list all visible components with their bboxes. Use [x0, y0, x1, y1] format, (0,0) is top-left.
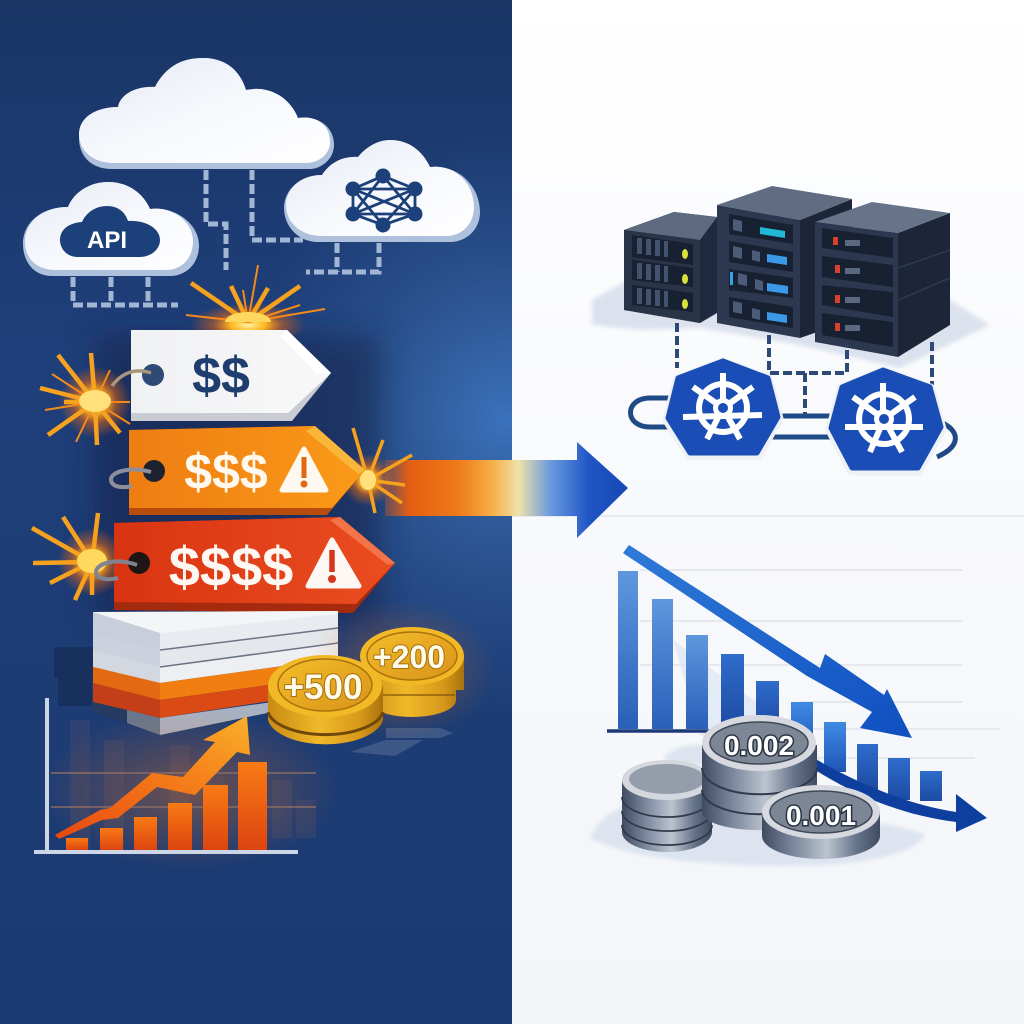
- coin stack: +200: [360, 627, 464, 717]
- icon: server rack center: [717, 186, 852, 338]
- icon: left burst top: [40, 353, 131, 445]
- kubernetes ring: [630, 398, 955, 457]
- coin stack: +500: [268, 655, 383, 744]
- chart glow and gridlines: [40, 710, 340, 870]
- icon: kubernetes left: [668, 361, 778, 455]
- coin stack: +200: +200: [373, 639, 445, 675]
- coin stack: 0.001: [762, 785, 880, 859]
- tag: dollar two: [112, 330, 331, 421]
- tag shadow: [95, 335, 380, 625]
- network connector lines: [677, 323, 932, 415]
- coin stack: 0.002: [702, 715, 817, 830]
- coin glow: [305, 600, 495, 740]
- arrow: large falling: [623, 545, 912, 738]
- cloud connector lines: [73, 170, 379, 305]
- icon: right burst: [342, 428, 412, 513]
- stacked layers: [93, 611, 338, 735]
- arrow: cost migration: [385, 442, 628, 538]
- icon: server rack left: [624, 212, 717, 323]
- coin stack: +500: +500: [284, 668, 362, 707]
- coin stack: 0.001: 0.001: [786, 800, 856, 831]
- panel: self-hosted side: [512, 0, 1024, 1024]
- icon: top burst: [186, 265, 325, 347]
- icon: server rack right: [815, 202, 950, 357]
- server shadow: [592, 282, 990, 368]
- icon: large cloud: [79, 58, 334, 169]
- icon: API cloud: [23, 182, 199, 276]
- bar chart: falling cost: [607, 570, 1000, 801]
- tag: dollar three warning: [111, 426, 365, 515]
- coin stack: plain: [622, 760, 712, 852]
- icon: left burst bottom: [32, 513, 126, 600]
- coin shadow shapes: [350, 728, 453, 756]
- panel: cloud cost side: [0, 0, 512, 1024]
- tag: dollar three warning: $$$: [184, 444, 268, 500]
- tag: dollar four warning: $$$$: [169, 535, 293, 598]
- ghost squares behind stack: [54, 647, 93, 706]
- arrow: rising trend: [55, 716, 250, 839]
- arrow: small falling: [812, 757, 987, 832]
- bar chart: rising cost: [34, 698, 298, 852]
- coin stack: 0.002: 0.002: [724, 730, 794, 761]
- label: API: API: [87, 227, 127, 254]
- tag: dollar four warning: [96, 517, 395, 613]
- icon: kubernetes right: [831, 370, 941, 470]
- coin shadow: [590, 745, 925, 866]
- tag: dollar two: $$: [192, 347, 250, 405]
- icon: neural network cloud: [284, 140, 480, 242]
